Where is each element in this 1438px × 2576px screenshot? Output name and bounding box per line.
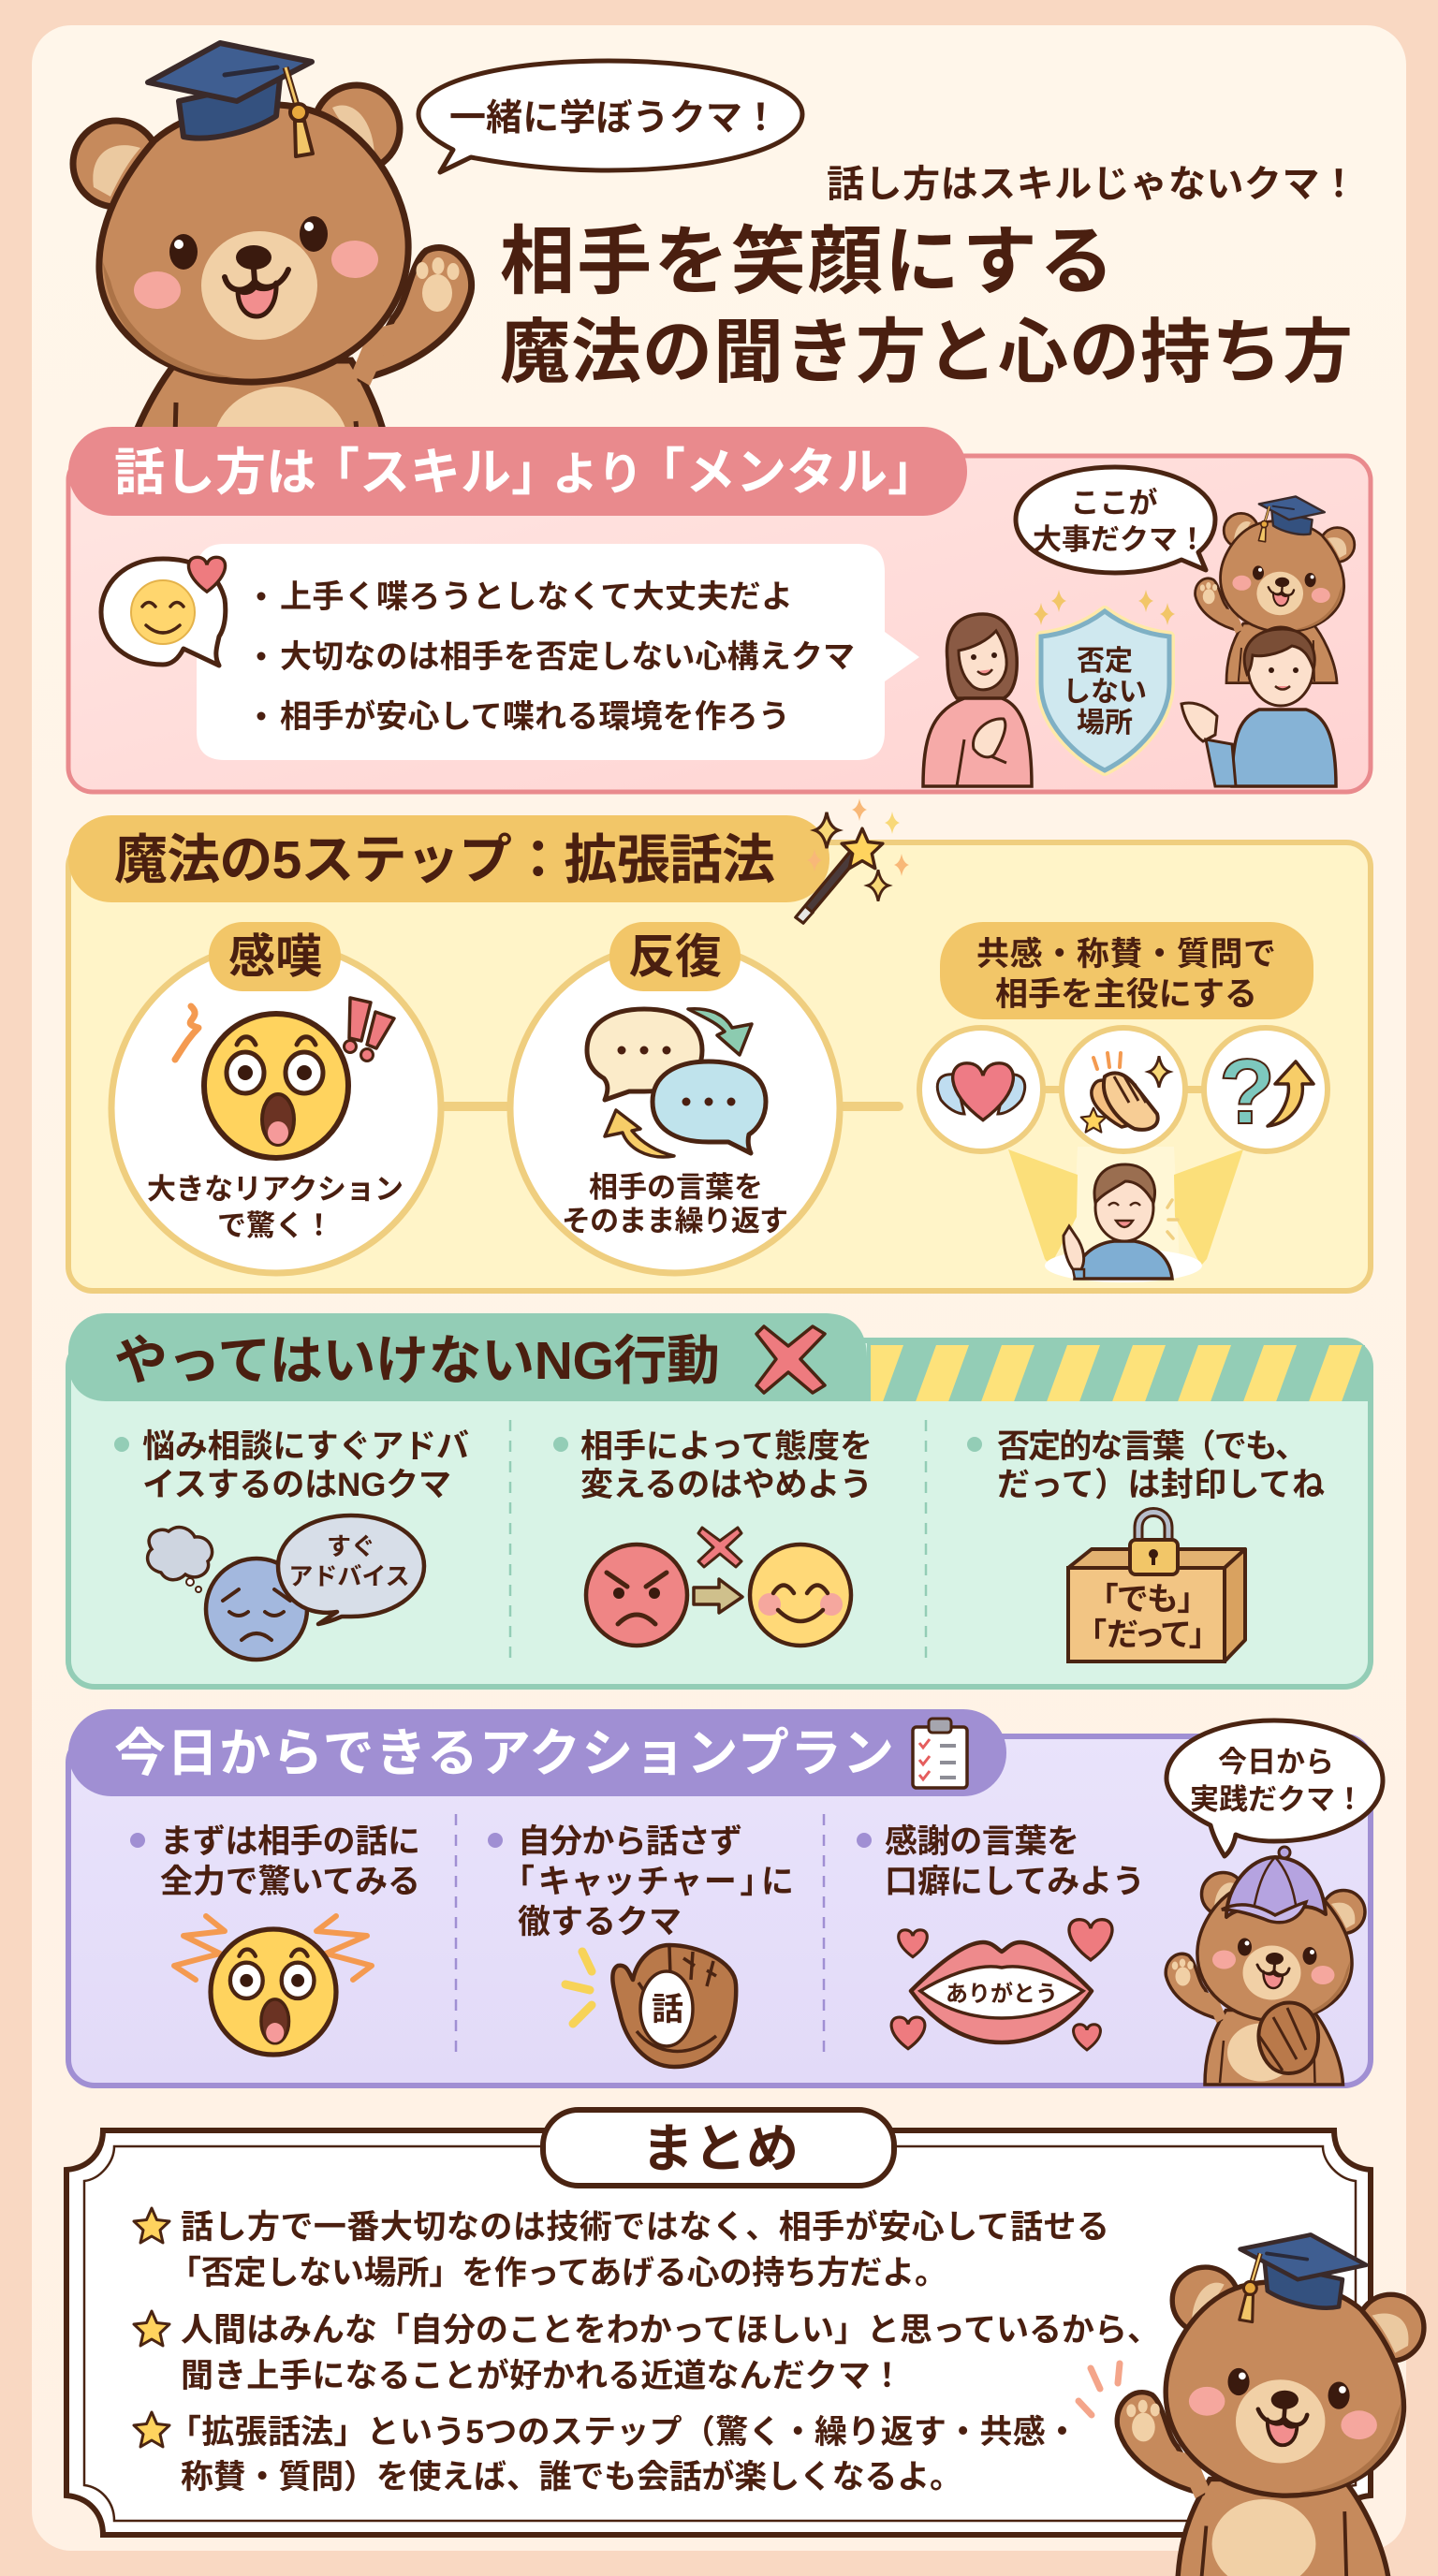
heading: まとめ	[543, 2110, 894, 2186]
tag: 反復: 反復	[628, 930, 722, 983]
caption: 相手の言葉をそのまま繰り返す: そのまま繰り返す	[562, 1205, 788, 1237]
summary point 3	[134, 2412, 1078, 2496]
action item 3 text: 感謝の言葉を	[885, 1823, 1079, 1860]
summary point 3: 称賛・質問）を使えば、誰でも会話が楽しくなるよ。	[181, 2459, 962, 2496]
NG item 2 text: 相手によって態度を	[580, 1428, 873, 1465]
caption: 相手の言葉をそのまま繰り返す	[562, 1171, 788, 1237]
action item 1 text: 全力で驚いてみる	[160, 1864, 420, 1900]
tag: 感嘆: 感嘆	[228, 930, 322, 983]
action item 2 text: 自分から話さず	[518, 1823, 742, 1860]
speech bubble: 今日から実践だクマ！: 今日から	[1218, 1746, 1334, 1778]
icon: sad face with advice bubble: すぐ	[327, 1532, 375, 1560]
section 3 heading: やってはいけないNG行動	[114, 1331, 720, 1391]
section 1 heading: 「メンタル」	[635, 445, 938, 501]
icon circle: clapping hands	[1062, 1028, 1185, 1151]
summary point 3: 「拡張話法」という5つのステップ（驚く・繰り返す・共感・	[169, 2414, 1078, 2451]
white callout with three bullets: 上手く喋ろうとしなくて大丈夫だよ	[280, 579, 793, 615]
icon: locked box 「でも」「だって」	[1068, 1513, 1245, 1661]
icon: locked box 「でも」「だって」: 「でも」	[1102, 1582, 1194, 1617]
bar linking small circles	[1030, 1086, 1217, 1093]
icon: baseball glove catching 話: 話	[652, 1992, 683, 2027]
NG item 3 text: 否定的な言葉（でも、	[997, 1428, 1308, 1465]
NG item 1 text	[114, 1428, 469, 1503]
tag: 感嘆	[209, 922, 341, 991]
main title: 魔法の聞き方と心の持ち方	[500, 313, 1353, 391]
hazard stripe band	[867, 1339, 1371, 1401]
section 1 heading: 「スキル」	[309, 445, 562, 501]
bear with purple cap and glove	[1166, 1847, 1365, 2085]
icon: surprised face	[175, 998, 394, 1158]
person cheering in the spotlight	[1045, 1164, 1202, 1282]
action item 1 text	[130, 1823, 420, 1900]
section 1 heading: より	[552, 449, 643, 500]
action item 2 text	[488, 1823, 793, 1940]
icon circle: question and up arrow: ?	[1219, 1040, 1275, 1143]
icon: sad face with advice bubble: アドバイス	[288, 1562, 410, 1590]
spotlight beams	[1008, 1147, 1243, 1266]
panel: やってはいけないNG行動	[68, 1313, 1371, 1687]
tag: 反復	[609, 922, 741, 991]
small bear with cap giving thumbs up	[1196, 496, 1355, 683]
shield: 否定しない場所: しない	[1063, 677, 1147, 708]
NG item 2 text: 変えるのはやめよう	[580, 1467, 873, 1503]
mascot bear: lower right waving	[1078, 2234, 1424, 2576]
panel: 魔法の5ステップ	[68, 798, 1371, 1291]
spark lines	[1078, 2364, 1120, 2415]
dividers	[456, 1814, 824, 2056]
dividers	[510, 1420, 926, 1664]
action item 1 text: まずは相手の話に	[160, 1823, 420, 1860]
summary point 1	[134, 2208, 1109, 2291]
white callout with three bullets: 相手が安心して喋れる環境を作ろう	[280, 698, 790, 735]
white callout with three bullets	[197, 544, 919, 760]
shield: 否定しない場所	[1034, 590, 1175, 770]
NG item 1 text: 悩み相談にすぐアドバ	[142, 1428, 469, 1465]
icon: two chat bubbles with arrows	[587, 1009, 766, 1157]
icon: big cross	[756, 1326, 825, 1393]
mascot bear: graduate waving	[73, 43, 472, 509]
speech bubble: ここが大事だクマ！: 大事だクマ！	[1033, 523, 1207, 556]
speech bubble: 今日から実践だクマ！: 実践だクマ！	[1190, 1783, 1364, 1816]
section 1 heading	[68, 427, 967, 516]
action item 2 text: 徹するクマ	[518, 1904, 682, 1940]
NG item 3 text: だって）は封印してね	[997, 1467, 1325, 1503]
panel: 話し方は「スキル」より「メンタル」	[68, 427, 1371, 792]
connector bars	[442, 1102, 899, 1111]
white callout with three bullets: 大切なのは相手を否定しない心構えクマ	[280, 639, 855, 675]
speech bubble: 一緒に学ぼうクマ！	[418, 61, 802, 172]
panel: まとめ summary frame	[66, 2110, 1371, 2535]
speech bubble: 一緒に学ぼうクマ！: 一緒に学ぼうクマ！	[449, 98, 779, 139]
woman with hand on chest	[923, 614, 1032, 786]
NG item 2 text	[553, 1428, 873, 1503]
shield: 否定しない場所: 場所	[1077, 708, 1133, 739]
icon: sad face with advice bubble	[148, 1515, 424, 1660]
caption: 大きなリアクションで驚く！	[147, 1173, 404, 1242]
action item 3 text: 口癖にしてみよう	[885, 1864, 1145, 1900]
speech bubble: ここが大事だクマ！	[1016, 467, 1215, 573]
icon: clipboard checklist	[913, 1719, 967, 1788]
caption: 相手の言葉をそのまま繰り返す: 相手の言葉を	[589, 1171, 763, 1204]
tag: 共感・称賛・質問で相手を主役にする: 相手を主役にする	[995, 976, 1257, 1013]
main title: 相手を笑顔にする	[500, 220, 1114, 303]
summary point 2	[134, 2311, 1160, 2394]
panel: 今日からできるアクションプラン	[68, 1709, 1383, 2086]
subtitle: 話し方はスキルじゃないクマ！	[827, 164, 1357, 205]
tag: 共感・称賛・質問で相手を主役にする: 共感・称賛・質問で	[976, 936, 1276, 973]
action item 3 text	[857, 1823, 1145, 1900]
tag: 共感・称賛・質問で相手を主役にする	[940, 922, 1313, 1019]
icon: baseball glove catching 話	[565, 1945, 736, 2067]
icon circle: winged heart	[919, 1028, 1043, 1151]
summary point 1: 話し方で一番大切なのは技術ではなく、相手が安心して話せる	[181, 2209, 1109, 2246]
man in blue gesturing	[1181, 627, 1336, 786]
shield: 否定しない場所: 否定	[1077, 646, 1133, 677]
speech bubble: ここが大事だクマ！: ここが	[1071, 487, 1157, 520]
icon: surprised face with zigzags	[174, 1916, 372, 2055]
summary point 2: 聞き上手になることが好かれる近道なんだクマ！	[181, 2358, 903, 2394]
action item 2 text: 「キャッチャー」に	[518, 1864, 793, 1900]
icon: lips saying ありがとう with hearts: ありがとう	[946, 1981, 1058, 2007]
icon: locked box 「でも」「だって」: 「だって」	[1091, 1617, 1205, 1653]
main title	[500, 220, 1353, 391]
heading: まとめ: まとめ	[641, 2119, 799, 2178]
step circle: 反復	[510, 922, 840, 1273]
icon: angry face to smiling face	[586, 1528, 851, 1646]
section 2 heading: 魔法の5ステップ：拡張話法	[114, 830, 775, 890]
section 3 heading	[68, 1313, 867, 1401]
caption: 大きなリアクションで驚く！: 大きなリアクション	[147, 1173, 404, 1206]
summary point 1: 「否定しない場所」を作ってあげる心の持ち方だよ。	[169, 2255, 947, 2291]
icon circle: question and up arrow	[1204, 1028, 1328, 1151]
summary point 2: 人間はみんな「自分のことをわかってほしい」と思っているから、	[181, 2312, 1160, 2349]
icon: magic wand with sparkles	[796, 798, 909, 923]
section 4 heading: 今日からできるアクションプラン	[114, 1724, 894, 1782]
section 2 heading	[68, 815, 829, 902]
NG item 1 text: イスするのはNGクマ	[142, 1467, 451, 1503]
caption: 大きなリアクションで驚く！: で驚く！	[217, 1209, 333, 1242]
icon: lips saying ありがとう with hearts	[891, 1920, 1112, 2050]
speech bubble: 今日から実践だクマ！	[1167, 1720, 1383, 1856]
step circle: 感嘆	[111, 922, 441, 1273]
NG item 3 text	[967, 1428, 1325, 1503]
icon: smiling face speech bubble with heart	[101, 557, 226, 666]
section 4 heading	[68, 1709, 1006, 1796]
section 1 heading: 話し方は	[114, 445, 316, 501]
